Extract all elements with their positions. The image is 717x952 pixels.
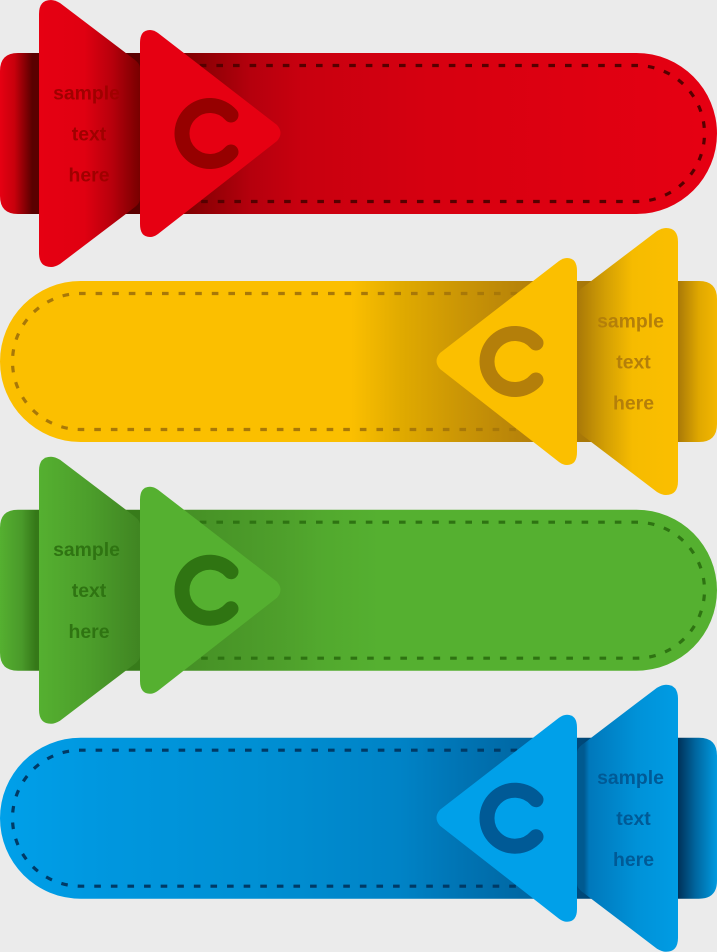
text: sample text here red: text <box>72 124 107 146</box>
icon: letter C yellow <box>487 334 536 390</box>
stitching: blue <box>12 750 567 886</box>
text: sample text here green: here <box>69 621 110 643</box>
band: red <box>0 53 717 214</box>
text: sample text here yellow <box>597 310 664 414</box>
text: sample text here blue: here <box>613 849 654 871</box>
back arrow: green <box>39 457 140 724</box>
stitching: yellow <box>12 294 567 430</box>
text: sample text here red <box>53 82 120 186</box>
band: yellow <box>0 281 717 442</box>
banner: green <box>0 457 717 724</box>
band: green <box>0 510 717 671</box>
icon: letter C blue <box>487 790 536 846</box>
text: sample text here green: text <box>72 580 107 602</box>
band: blue <box>0 738 717 899</box>
stitching: green <box>150 522 704 658</box>
text: sample text here blue <box>597 767 664 871</box>
front arrow: green <box>140 487 280 694</box>
front arrow: blue <box>436 715 577 922</box>
banner: yellow <box>0 228 717 495</box>
banner: red <box>0 0 717 267</box>
text: sample text here green <box>53 539 120 643</box>
text: sample text here yellow: here <box>613 392 654 414</box>
back arrow: red <box>39 0 140 267</box>
text: sample text here red: here <box>69 164 110 186</box>
front arrow: yellow <box>436 258 577 465</box>
text: sample text here green: sample <box>53 539 120 561</box>
icon: letter C red <box>182 106 231 162</box>
text: sample text here yellow: text <box>616 352 651 374</box>
text: sample text here blue: text <box>616 808 651 830</box>
text: sample text here red: sample <box>53 82 120 104</box>
text: sample text here blue: sample <box>597 767 664 789</box>
icon: letter C green <box>182 562 231 618</box>
back arrow: blue <box>577 685 678 952</box>
banner: blue <box>0 685 717 952</box>
text: sample text here yellow: sample <box>597 310 664 332</box>
back arrow: yellow <box>577 228 678 495</box>
stitching: red <box>150 66 704 202</box>
front arrow: red <box>140 30 280 237</box>
